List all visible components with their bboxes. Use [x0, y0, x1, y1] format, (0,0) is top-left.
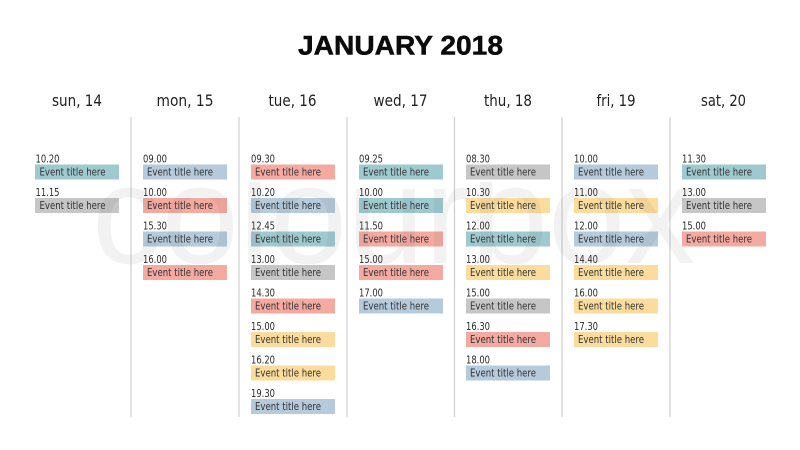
heading: sun, 14: sun, 14 [52, 91, 102, 110]
event: 10.30: Event title here [470, 199, 536, 212]
event: 16.30: Event title here [470, 333, 536, 346]
event: 16.20 [251, 354, 335, 380]
event: 11.50 [359, 220, 443, 246]
event: 14.40: 14.40 [574, 253, 598, 266]
event: 15.30: Event title here [147, 232, 213, 246]
event: 11.00 [574, 186, 658, 213]
event: 18.00: Event title here [470, 366, 536, 380]
event: 15.00: 15.00 [682, 220, 706, 232]
title: JANUARY 2018 [298, 30, 503, 60]
event: 17.00: 17.00 [359, 286, 383, 300]
event: 10.00 [574, 152, 658, 180]
event: 10.00: 10.00 [574, 152, 598, 166]
event: 10.00: Event title here [147, 199, 213, 212]
event: 16.30 [466, 320, 550, 347]
event: 15.00: Event title here [686, 232, 752, 246]
event: 11.15: 11.15 [36, 186, 60, 199]
event: 09.25: Event title here [363, 166, 429, 178]
event: 15.00 [466, 286, 550, 314]
event: 13.00: Event title here [470, 266, 536, 279]
panel: wednesday column [359, 91, 443, 314]
event: 14.30: 14.30 [251, 286, 275, 300]
event: 15.30: 15.30 [143, 220, 167, 232]
panel: saturday column [682, 91, 766, 246]
event: 14.40 [574, 253, 658, 280]
watermark: colourbox [92, 136, 695, 293]
heading: sat, 20: sat, 20 [701, 91, 746, 110]
event: 15.30 [143, 220, 227, 246]
panel: thursday column [466, 91, 550, 380]
event: 16.00 [143, 253, 227, 280]
event: 13.00: 13.00 [251, 253, 275, 266]
event: 13.00 [466, 253, 550, 280]
event: 11.00: Event title here [578, 199, 644, 212]
event: 17.00 [359, 286, 443, 314]
event: 17.30: 17.30 [574, 320, 598, 333]
panel: monday column [143, 91, 227, 280]
event: 15.00 [682, 220, 766, 246]
heading: wed, 17: wed, 17 [374, 91, 428, 110]
event: 11.50: 11.50 [359, 220, 383, 232]
event: 14.30: Event title here [255, 300, 321, 312]
event: 18.00 [466, 354, 550, 380]
event: 10.00: Event title here [578, 166, 644, 178]
event: 11.30 [682, 152, 766, 180]
event: 15.00: Event title here [363, 266, 429, 279]
event: 10.00 [359, 186, 443, 213]
event: 12.00 [466, 220, 550, 246]
event: 15.00: Event title here [255, 333, 321, 346]
event: 09.30: 09.30 [251, 152, 275, 166]
event: 15.00: 15.00 [251, 320, 275, 333]
event: 11.30: Event title here [686, 166, 752, 178]
event: 17.30 [574, 320, 658, 347]
event: 16.20: Event title here [255, 366, 321, 380]
panel: friday column [574, 91, 658, 347]
heading: tue, 16: tue, 16 [268, 91, 316, 110]
event: 15.00 [251, 320, 335, 347]
event: 12.00: Event title here [578, 232, 644, 246]
event: 11.15 [35, 186, 119, 213]
event: 12.00: 12.00 [466, 220, 490, 232]
event: 12.00 [574, 220, 658, 246]
event: 16.20: 16.20 [251, 354, 275, 366]
event: 10.20: Event title here [255, 199, 321, 212]
panel: tuesday column [251, 91, 335, 414]
event: 16.00: Event title here [578, 300, 644, 312]
event: 11.15: Event title here [40, 199, 106, 212]
event: 10.20 [251, 186, 335, 213]
heading: mon, 15: mon, 15 [156, 91, 214, 110]
event: 08.30: Event title here [470, 166, 536, 178]
heading: fri, 19: fri, 19 [596, 91, 636, 110]
event: 10.30 [466, 186, 550, 213]
event: 09.25: 09.25 [359, 152, 383, 166]
event: 10.20: Event title here [40, 166, 106, 178]
event: 19.30: 19.30 [251, 387, 275, 400]
event: 10.00: Event title here [363, 199, 429, 212]
event: 16.00 [574, 286, 658, 314]
event: 13.00 [682, 186, 766, 213]
event: 15.00: 15.00 [359, 253, 383, 266]
event: 09.00: 09.00 [143, 152, 167, 166]
event: 09.30 [251, 152, 335, 180]
event: 10.00: 10.00 [143, 186, 167, 199]
event: 10.00: 10.00 [359, 186, 383, 199]
event: 18.00: 18.00 [466, 354, 490, 366]
event: 09.30: Event title here [255, 166, 321, 178]
event: 15.00: 15.00 [466, 286, 490, 300]
event: 15.00: Event title here [470, 300, 536, 312]
heading: thu, 18: thu, 18 [484, 91, 532, 110]
event: 16.00: Event title here [147, 266, 213, 279]
event: 12.45: 12.45 [251, 220, 275, 232]
event: 13.00 [251, 253, 335, 280]
event: 10.00 [143, 186, 227, 213]
event: 19.30: Event title here [255, 400, 321, 413]
event: 13.00: 13.00 [466, 253, 490, 266]
event: 11.50: Event title here [363, 232, 429, 246]
event: 10.20: 10.20 [251, 186, 275, 199]
event: 12.00: Event title here [470, 232, 536, 246]
panel: sunday column [35, 91, 119, 213]
event: 14.40: Event title here [578, 266, 644, 279]
event: 14.30 [251, 286, 335, 314]
event: 10.20: 10.20 [36, 152, 60, 166]
event: 09.25 [359, 152, 443, 180]
event: 08.30 [466, 152, 550, 180]
event: 11.00: 11.00 [574, 186, 598, 199]
event: 17.00: Event title here [363, 300, 429, 312]
event: 12.45: Event title here [255, 232, 321, 246]
event: 12.45 [251, 220, 335, 246]
event: 09.00 [143, 152, 227, 180]
event: 10.30: 10.30 [466, 186, 490, 199]
event: 09.00: Event title here [147, 166, 213, 178]
event: 11.30: 11.30 [682, 152, 706, 166]
event: 13.00: Event title here [255, 266, 321, 279]
event: 16.00: 16.00 [143, 253, 167, 266]
event: 15.00 [359, 253, 443, 280]
event: 16.00: 16.00 [574, 286, 598, 300]
event: 10.20 [35, 152, 119, 180]
event: 16.30: 16.30 [466, 320, 490, 333]
event: 13.00: 13.00 [682, 186, 706, 199]
event: 12.00: 12.00 [574, 220, 598, 232]
event: 13.00: Event title here [686, 199, 752, 212]
event: 08.30: 08.30 [466, 152, 490, 166]
event: 17.30: Event title here [578, 333, 644, 346]
event: 19.30 [251, 387, 335, 414]
